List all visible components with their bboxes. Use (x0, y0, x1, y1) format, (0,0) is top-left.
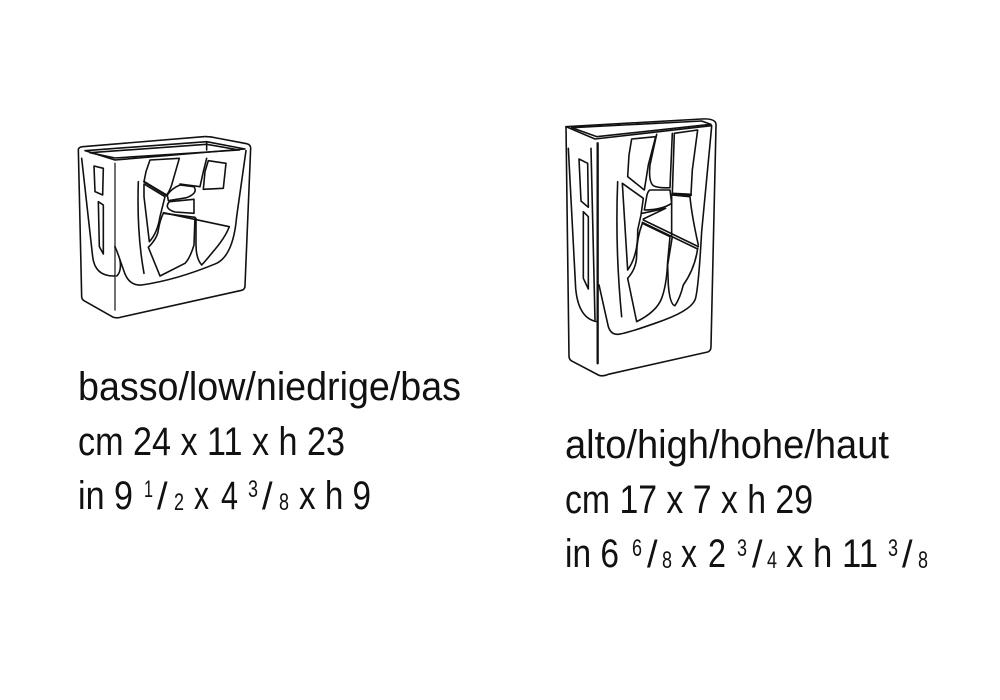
high vase size in inches: 3 (737, 535, 747, 562)
low vase size in inches: / (157, 476, 168, 518)
high vase name: alto/high/hohe/haut (565, 423, 889, 467)
icon: high vase line drawing (566, 119, 716, 376)
low vase size in inches: x (194, 474, 209, 518)
low vase size in centimetres: cm 24 x 11 x h 23 (78, 420, 345, 464)
low vase size in inches: 8 (279, 489, 289, 516)
high vase size in inches: 8 (662, 547, 672, 574)
icon: low vase line drawing (78, 137, 251, 318)
low vase size in inches: 3 (248, 476, 258, 503)
high vase size in inches: / (752, 534, 763, 576)
low vase name: basso/low/niedrige/bas (78, 365, 461, 409)
text block: low vase dimensions (78, 365, 461, 518)
high vase size in inches: 8 (918, 547, 928, 574)
low vase size in inches: in 9 (78, 474, 133, 518)
high vase size in inches: 6 (632, 535, 642, 562)
high vase size in inches: x (681, 532, 697, 576)
high vase size in inches: 4 (767, 547, 777, 574)
low vase size in inches: 4 (221, 474, 238, 518)
high vase size in inches: / (647, 534, 658, 576)
low vase size in inches: 1 (144, 476, 153, 503)
low vase size in inches: / (262, 476, 273, 518)
high vase size in inches: / (902, 534, 913, 576)
high vase size in centimetres: cm 17 x 7 x h 29 (565, 478, 813, 522)
low vase size in inches: x h 9 (299, 474, 371, 518)
high vase size in inches (565, 532, 928, 576)
high vase size in inches: in 6 (565, 532, 619, 576)
low vase size in inches (78, 474, 371, 518)
high vase size in inches: 2 (708, 532, 726, 576)
high vase size in inches: 3 (888, 535, 898, 562)
low vase size in inches: 2 (174, 489, 184, 516)
high vase size in inches: x h 11 (786, 532, 878, 576)
text block: high vase dimensions (565, 423, 928, 576)
